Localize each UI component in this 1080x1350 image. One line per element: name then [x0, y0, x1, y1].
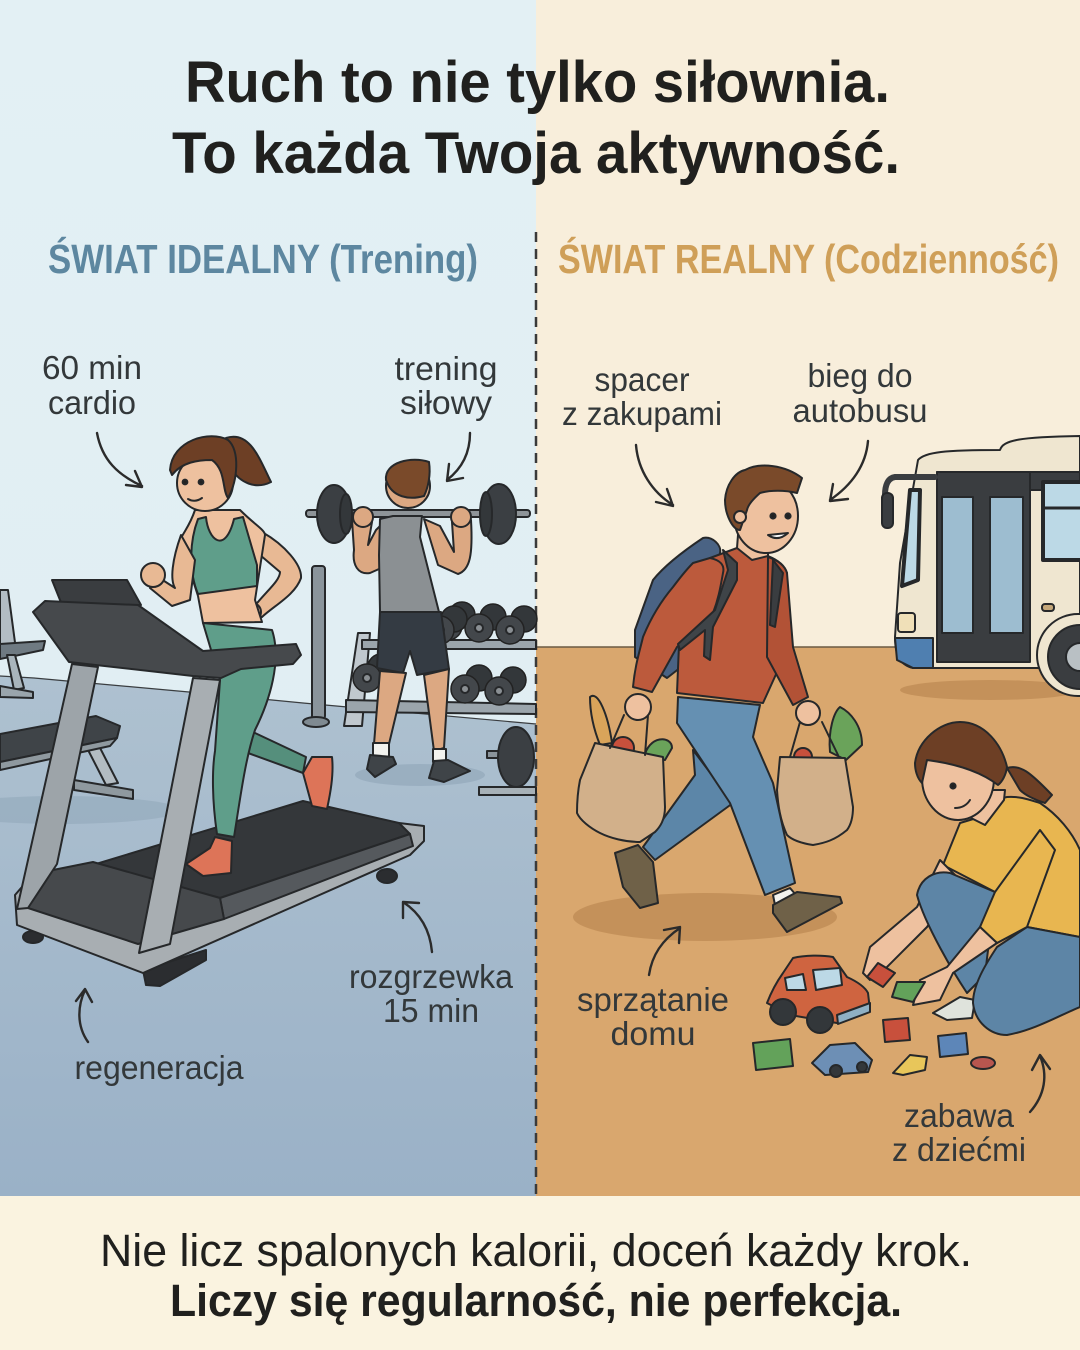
label: zabawa z dziećmi: z dziećmi — [892, 1131, 1026, 1168]
far strap — [770, 560, 783, 627]
neck — [965, 790, 1005, 825]
label: 60 min cardio: cardio — [48, 384, 136, 421]
closing message: Nie licz spalonych kalorii, doceń każdy krok. — [100, 1225, 972, 1276]
closing message: Liczy się regularność, nie perfekcja. — [170, 1275, 902, 1326]
treadmill uprights and console — [17, 580, 301, 953]
sweater back — [943, 797, 1080, 943]
label: sprzątanie domu: domu — [610, 1015, 696, 1052]
toy car red — [767, 956, 870, 1033]
label: sprzątanie domu: sprzątanie — [577, 981, 729, 1018]
label: regeneracja — [74, 989, 244, 1086]
treadmill deck — [15, 801, 424, 986]
man with shopping bags — [577, 466, 862, 932]
panel: real world background — [536, 0, 1080, 1196]
heading: ideal world: ŚWIAT IDEALNY (Trening) — [48, 236, 478, 282]
shorts — [377, 612, 449, 675]
title — [172, 50, 900, 186]
backpack — [635, 538, 720, 678]
front arm — [150, 535, 195, 606]
back shoe — [615, 845, 658, 908]
barbell stand — [303, 566, 329, 727]
doors — [937, 472, 1080, 662]
label: bieg do autobusu — [792, 357, 928, 501]
label: spacer z zakupami: z zakupami — [562, 395, 722, 432]
front shoe — [773, 892, 842, 932]
label: spacer z zakupami: spacer — [594, 361, 690, 398]
lower leg — [917, 872, 995, 993]
blocks — [753, 1039, 793, 1070]
far sleeve — [767, 557, 808, 705]
torso skin — [180, 510, 265, 623]
label: bieg do autobusu: bieg do — [808, 357, 912, 394]
bus — [882, 436, 1080, 696]
front leg — [677, 697, 795, 895]
arms — [352, 520, 388, 573]
legs — [374, 671, 406, 744]
closing message — [100, 1225, 972, 1326]
head — [177, 455, 233, 511]
headlight — [898, 613, 915, 632]
toys — [753, 956, 995, 1077]
near strap — [678, 550, 737, 660]
mirror — [885, 477, 935, 495]
left machine — [0, 590, 45, 698]
label: rozgrzewka 15 min: rozgrzewka — [349, 958, 514, 995]
bottom band background — [0, 1196, 1080, 1350]
ponytail — [226, 437, 271, 485]
label: trening siłowy — [394, 350, 498, 481]
sports bra — [191, 517, 257, 594]
near sleeve — [980, 830, 1055, 943]
label: trening siłowy: trening — [394, 350, 498, 387]
far arm — [863, 860, 960, 980]
man: strength training — [306, 460, 530, 782]
title: Ruch to nie tylko siłownia. — [185, 50, 890, 115]
label: spacer z zakupami — [562, 361, 722, 506]
label: sprzątanie domu — [577, 927, 729, 1052]
head — [386, 464, 430, 508]
back arm — [248, 532, 301, 617]
shoes — [367, 755, 396, 777]
label: rozgrzewka 15 min: 15 min — [383, 992, 479, 1029]
feet — [23, 931, 43, 943]
label: 60 min cardio — [42, 349, 142, 487]
panel: ideal world background — [0, 0, 536, 1196]
display — [52, 580, 141, 605]
back leg — [643, 750, 733, 860]
front window — [902, 490, 920, 586]
label: rozgrzewka 15 min — [349, 902, 514, 1029]
ponytail — [1007, 767, 1052, 803]
head — [922, 736, 994, 820]
gym equipment in background — [0, 566, 329, 799]
belt — [96, 801, 410, 898]
uprights — [17, 664, 98, 909]
sock — [773, 888, 796, 905]
bench — [0, 716, 133, 799]
wheel — [1037, 614, 1080, 696]
end cap — [28, 862, 224, 944]
hands — [625, 694, 651, 720]
near sleeve — [633, 558, 723, 692]
sweater — [677, 548, 787, 703]
head — [734, 479, 798, 553]
back leg — [232, 715, 306, 773]
foot — [933, 997, 975, 1020]
barbell — [306, 484, 530, 544]
label: bieg do autobusu: autobusu — [792, 392, 928, 429]
woman playing with child toys — [863, 722, 1080, 1035]
label: 60 min cardio: 60 min — [42, 349, 142, 386]
front leg — [203, 623, 276, 837]
dumbbell rack — [344, 602, 537, 795]
console — [33, 601, 301, 678]
torso — [379, 516, 439, 612]
label: zabawa z dziećmi: zabawa — [904, 1097, 1015, 1134]
label: regeneracja: regeneracja — [74, 1049, 244, 1086]
title: To każda Twoja aktywność. — [172, 121, 900, 186]
panel divider — [535, 232, 537, 1196]
label: trening siłowy: siłowy — [400, 384, 492, 421]
front shoe — [186, 837, 232, 876]
side window — [1043, 482, 1080, 560]
near arm — [913, 927, 997, 1005]
frame — [15, 823, 424, 973]
bag left — [577, 696, 672, 842]
thigh — [973, 927, 1080, 1035]
woman on treadmill — [141, 436, 333, 876]
bag right — [777, 707, 862, 845]
toy car blue — [812, 1043, 872, 1077]
neck — [737, 535, 768, 560]
label: zabawa z dziećmi — [892, 1055, 1050, 1168]
